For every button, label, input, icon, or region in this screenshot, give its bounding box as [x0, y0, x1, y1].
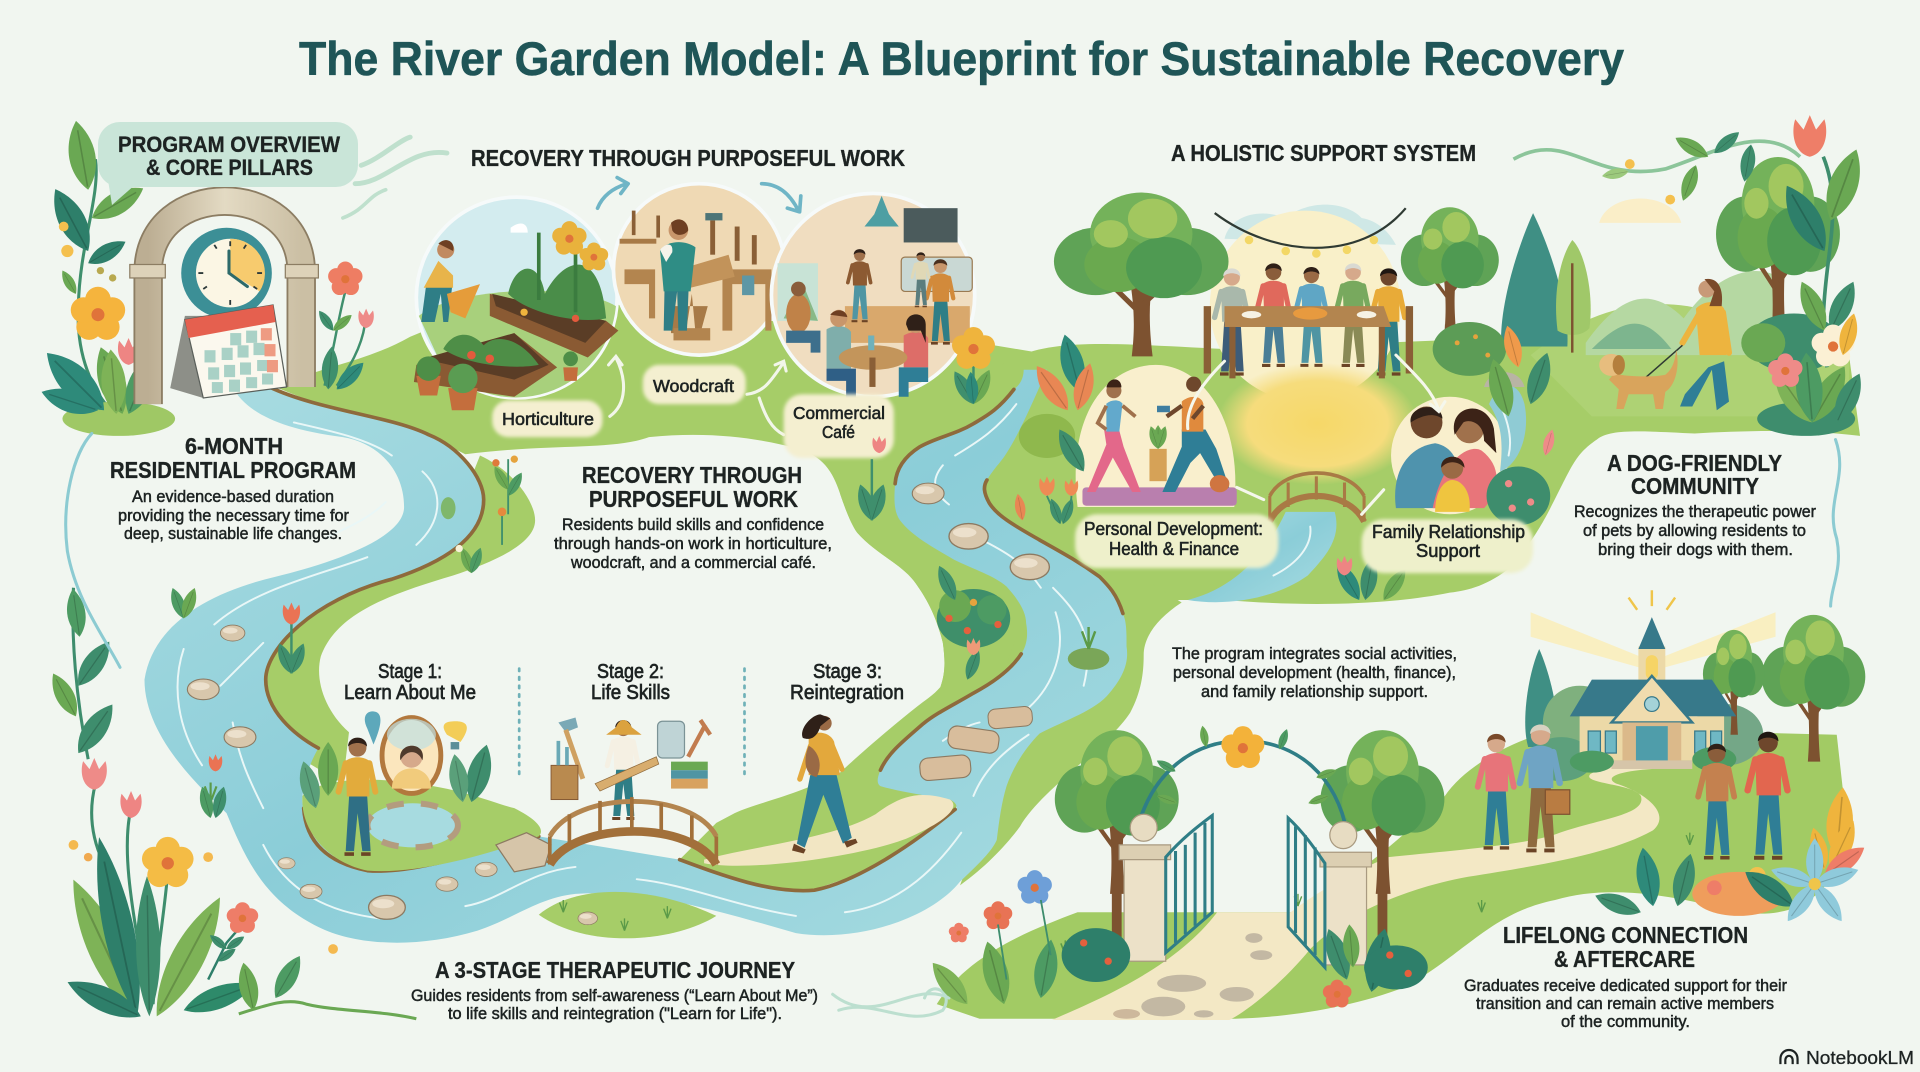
text block: 6-month residential program: providing the necessary time for: [118, 507, 349, 525]
icon: bush behind walker: [1741, 313, 1840, 372]
text block: lifelong connection: & AFTERCARE: [1554, 946, 1695, 972]
icon: bush on river bend: [933, 563, 1109, 682]
icon: small wooden bridge: [1270, 473, 1364, 522]
icon: calendar: [170, 305, 287, 398]
text block: recovery through purposeful work: Residents build skills and confidence: [562, 516, 824, 534]
icon: stone arch: [130, 201, 318, 404]
text block: recovery through purposeful work: PURPOSEFUL WORK: [589, 486, 798, 512]
icon: meadow plant right: [1757, 145, 1870, 436]
text block: a dog-friendly community: of pets by allowing residents to: [1583, 522, 1806, 540]
panel: holistic support land: [980, 304, 1860, 604]
icon: flower by river: [948, 327, 996, 408]
icon: garden gate: [925, 725, 1444, 1011]
labels: three stages: Reintegration: [790, 682, 904, 704]
labels: three stages: Stage 3:: [813, 661, 882, 683]
panel: aftercare land: [937, 576, 1849, 1019]
label: personal development: [1075, 514, 1278, 568]
text block: 6-month residential program: An evidence-based duration: [132, 488, 334, 506]
labels: three stages: Life Skills: [591, 682, 670, 704]
pale arrows to labels: [609, 356, 786, 435]
plants round holistic land: [1013, 324, 1557, 604]
label: woodcraft: [643, 365, 746, 404]
panel: woodcraft circle: [613, 184, 785, 355]
icon: circle exercise: [1076, 365, 1237, 507]
labels: support areas: Family Relationship: [1372, 521, 1525, 542]
text block: a dog-friendly community: A DOG-FRIENDLY: [1607, 450, 1782, 476]
text block: 6-month residential program: [110, 433, 356, 543]
labels: work areas: [502, 376, 885, 442]
labels: work areas: Woodcraft: [653, 376, 734, 396]
text block: three stage journey: [411, 957, 818, 1023]
icon: stage 3 walker: [792, 714, 858, 853]
labels: support areas: Health & Finance: [1109, 538, 1239, 559]
labels: work areas: Horticulture: [502, 409, 594, 429]
text block: recovery through purposeful work: woodcraft, and a commercial café.: [570, 554, 816, 572]
text block: a dog-friendly community: Recognizes the therapeutic power: [1574, 503, 1816, 521]
icon: school building: [1525, 590, 1865, 781]
labels: work areas: Commercial: [793, 403, 885, 423]
text block: program integrates: The program integrates social activities,: [1172, 645, 1457, 663]
labels: three stages: Stage 2:: [597, 661, 664, 683]
text block: three stage journey: Guides residents from self-awareness (“Learn About Me”): [411, 987, 818, 1005]
labels: support areas: Personal Development:: [1084, 518, 1263, 539]
text block: 6-month residential program: deep, sustainable life changes.: [124, 525, 342, 543]
small grassy islet: [539, 892, 716, 938]
text block: a dog-friendly community: COMMUNITY: [1631, 473, 1759, 499]
heading: a holistic support system: A HOLISTIC SUPPORT SYSTEM: [1171, 140, 1476, 166]
text block: a dog-friendly community: [1574, 450, 1816, 559]
heading: program overview: PROGRAM OVERVIEW: [118, 132, 341, 157]
winding river: [144, 370, 1127, 943]
sand path on stage 3 island: [704, 795, 953, 866]
icon: string lights: [1215, 208, 1406, 258]
label: commercial cafe: [784, 394, 894, 458]
dotted stage dividers: [519, 669, 744, 776]
water stream and waterfall: [1188, 372, 1526, 602]
label: horticulture: [492, 400, 602, 437]
panel: commercial cafe circle: [771, 193, 975, 398]
icon: right tree: [1716, 157, 1840, 340]
text block: lifelong connection: [1464, 922, 1787, 1031]
title: The River Garden Model: A Blueprint for Sustainable Recovery: [299, 32, 1624, 85]
icon: graduates greeting: [1478, 724, 1787, 860]
stepping stones: [187, 483, 1049, 919]
text block: lifelong connection: LIFELONG CONNECTION: [1503, 922, 1748, 948]
icon: left vine with flower: [36, 119, 175, 436]
icon: big tree left: [1054, 193, 1229, 356]
figure: woman walking dog: [1599, 279, 1729, 410]
labels: three stages: Learn About Me: [344, 682, 476, 704]
wordmark: notebooklm: NotebookLM: [1806, 1048, 1914, 1068]
labels: support areas: Support: [1416, 540, 1480, 561]
text block: lifelong connection: of the community.: [1561, 1013, 1690, 1031]
text block: program integrates: [1172, 645, 1457, 701]
text block: lifelong connection: Graduates receive dedicated support for their: [1464, 977, 1787, 995]
icon: stage 1 mirror scene: [295, 711, 541, 871]
icon: cypress and small tree: [1433, 213, 1591, 376]
icon: program overview flourish: [343, 137, 447, 218]
text block: 6-month residential program: 6-MONTH: [185, 433, 283, 459]
text block: lifelong connection: transition and can remain active members: [1476, 995, 1774, 1013]
panel: purposeful work land: [276, 294, 1078, 900]
icon: shared meal table: [1204, 263, 1413, 378]
icon: circle family: [1391, 397, 1509, 514]
icon: orchard tree: [1401, 207, 1499, 351]
text block: recovery through purposeful work: through hands-on work in horticulture,: [554, 535, 832, 553]
text block: recovery through purposeful work: [554, 462, 832, 572]
labels: three stages: Stage 1:: [378, 661, 442, 683]
heading: program overview: [98, 122, 358, 205]
arrows between work circles: [598, 178, 801, 212]
text block: three stage journey: A 3-STAGE THERAPEUTIC JOURNEY: [435, 957, 795, 983]
heading: program overview: & CORE PILLARS: [146, 155, 313, 180]
panel: holistic background shapes: [1210, 205, 1418, 485]
labels: three stages: [344, 661, 904, 704]
icon: distant hills and sun: [1586, 198, 1776, 355]
text block: three stage journey: to life skills and reintegration ("Learn for Life").: [448, 1005, 782, 1023]
icon: clock: [181, 228, 272, 318]
labels: support areas: [1084, 518, 1525, 561]
text block: 6-month residential program: RESIDENTIAL PROGRAM: [110, 457, 356, 483]
icon: flowers beside arch: [315, 262, 374, 394]
panel: aftercare garden: [1052, 761, 1693, 1020]
icon: pale ribbons: [66, 433, 1840, 1016]
icon: plants on left bank: [167, 436, 890, 820]
text block: recovery through purposeful work: RECOVERY THROUGH: [582, 462, 802, 488]
icon: lower left plant: [45, 587, 416, 1027]
icon: stage 2 bridge with worker: [496, 718, 716, 872]
icon: top right vine: [1513, 115, 1826, 204]
label: family relationship: [1362, 519, 1533, 573]
arrows between support circles: [1188, 355, 1445, 514]
panel: horticulture circle: [414, 197, 618, 410]
icon: aftercare flowers: [1592, 786, 1869, 926]
text block: program integrates: personal development (health, finance),: [1173, 664, 1456, 682]
panel: left green bank: [251, 456, 535, 784]
text block: program integrates: and family relationship support.: [1201, 683, 1428, 701]
heading: recovery through purposeful work: RECOVERY THROUGH PURPOSEFUL WORK: [471, 145, 905, 171]
icon: notebooklm mark: [1780, 1050, 1798, 1064]
labels: work areas: Café: [822, 422, 855, 442]
text block: a dog-friendly community: bring their dogs with them.: [1598, 541, 1793, 559]
